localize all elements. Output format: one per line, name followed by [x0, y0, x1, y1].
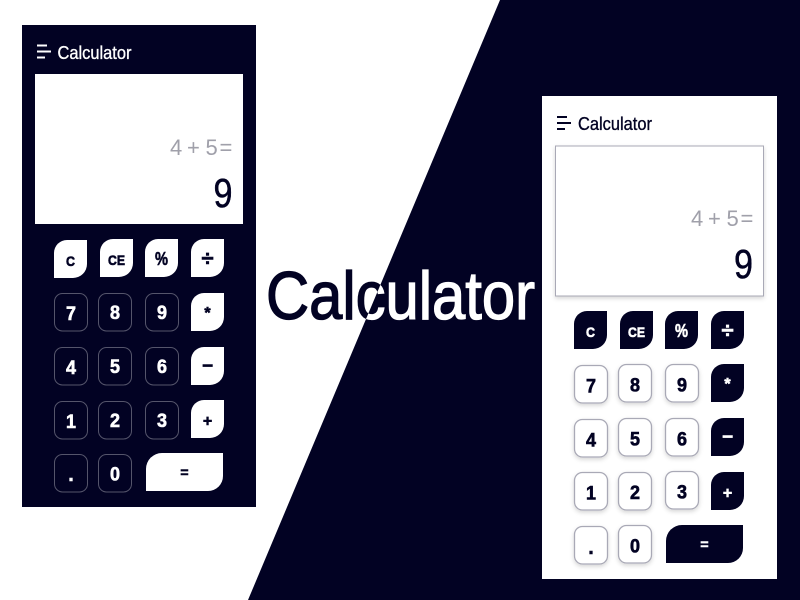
- keypad: dark calculator: C: [66, 253, 75, 269]
- display: dark calculator: 4 + 5 =: [170, 135, 232, 160]
- keypad: dark calculator: 1: [66, 412, 76, 433]
- keypad: light calculator: [574, 311, 744, 564]
- keypad: dark calculator: 7: [66, 304, 76, 325]
- keypad: dark calculator: ÷: [201, 246, 214, 271]
- icon: menu light: [557, 116, 571, 130]
- keypad: dark calculator: [54, 239, 224, 492]
- keypad: light calculator: 9: [677, 376, 687, 396]
- keypad: dark calculator: *: [204, 305, 211, 322]
- heading: light calculator: Calculator: [578, 114, 652, 134]
- keypad: light calculator: 8: [630, 376, 640, 396]
- keypad: dark calculator: .: [68, 465, 74, 486]
- keypad: light calculator: .: [588, 538, 594, 559]
- keypad: dark calculator: 8: [110, 303, 120, 324]
- keypad: dark calculator: −: [202, 356, 213, 377]
- keypad: dark calculator: 4: [66, 358, 76, 379]
- display: light calculator: [556, 146, 764, 296]
- dark diagonal background: [248, 0, 800, 600]
- keypad: dark calculator: =: [180, 464, 189, 480]
- keypad: light calculator: −: [722, 427, 733, 448]
- keypad: light calculator: 2: [630, 483, 640, 504]
- keypad: light calculator: =: [700, 536, 709, 552]
- keypad: dark calculator: 9: [157, 303, 167, 324]
- keypad: dark calculator: %: [155, 249, 168, 269]
- display: dark calculator: 9: [214, 170, 232, 216]
- panel: dark calculator: [22, 25, 256, 507]
- keypad: dark calculator: 6: [157, 357, 167, 378]
- display: dark calculator: [35, 74, 243, 224]
- keypad: light calculator: 5: [630, 430, 640, 450]
- keypad: light calculator: 0: [630, 536, 640, 558]
- keypad: dark calculator: 5: [110, 357, 120, 378]
- keypad: dark calculator: 2: [110, 411, 120, 432]
- keypad: light calculator: %: [675, 321, 688, 341]
- keypad: light calculator: +: [723, 485, 732, 502]
- heading: dark calculator: Calculator: [58, 43, 132, 63]
- keypad: light calculator: ÷: [721, 318, 734, 343]
- keypad: light calculator: 7: [586, 376, 596, 398]
- keypad: light calculator: 4: [586, 430, 596, 452]
- keypad: light calculator: 3: [677, 482, 687, 504]
- keypad: dark calculator: CE: [108, 252, 125, 268]
- display: light calculator: 9: [734, 241, 753, 287]
- main title: [268, 269, 535, 320]
- main title: Calculator: [266, 258, 535, 334]
- keypad: dark calculator: 3: [157, 411, 167, 432]
- keypad: light calculator: *: [724, 376, 731, 393]
- keypad: light calculator: 6: [677, 430, 687, 450]
- display: light calculator: 4 + 5 =: [691, 206, 753, 231]
- keypad: dark calculator: +: [203, 413, 212, 430]
- keypad: light calculator: 1: [586, 484, 596, 504]
- main title: Calculator: [266, 258, 535, 334]
- icon: menu: [37, 44, 51, 58]
- panel: light calculator: [542, 96, 777, 579]
- keypad: dark calculator: 0: [110, 464, 120, 486]
- keypad: light calculator: CE: [628, 324, 645, 340]
- keypad: light calculator: C: [586, 324, 595, 340]
